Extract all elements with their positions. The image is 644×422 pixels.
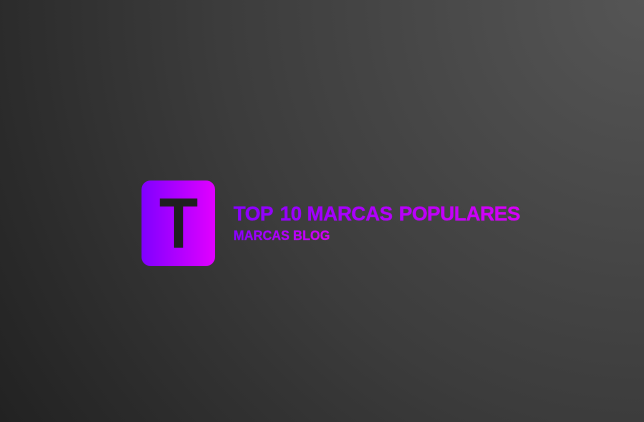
title: 10 (280, 204, 302, 226)
logo icon (142, 180, 215, 266)
title: TOP (234, 204, 273, 226)
subtitle: MARCAS BLOG (234, 228, 330, 243)
title: POPULARES (399, 204, 520, 226)
title: MARCAS (307, 204, 393, 226)
logo icon: T (159, 185, 198, 264)
